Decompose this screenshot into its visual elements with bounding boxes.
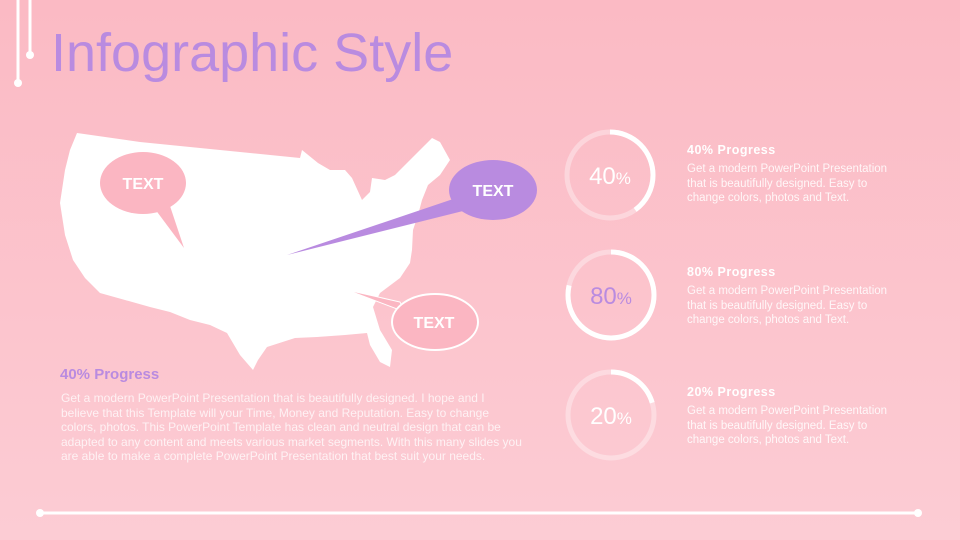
left heading: 40% Progress <box>60 366 159 383</box>
item text 20%: that is beautifully designed. Easy to <box>687 420 867 432</box>
item text 80%: that is beautifully designed. Easy to <box>687 300 867 312</box>
left body text: are able to make a complete PowerPoint Presentation that best suit your needs. <box>61 449 485 463</box>
item text 20%: Get a modern PowerPoint Presentation <box>687 405 887 417</box>
ring 40% <box>567 132 653 218</box>
item text 80%: change colors, photos and Text. <box>687 314 849 326</box>
ring 20%: 20% <box>590 403 632 430</box>
ring 80% <box>568 252 654 338</box>
left body text: adapted to any content and meets various market segments. With this many slides you <box>61 434 522 448</box>
ring 80%: 80% <box>590 283 632 310</box>
item text 40%: change colors, photos and Text. <box>687 192 849 204</box>
callout: purple bubble <box>287 160 537 255</box>
callout: left bubble <box>100 152 186 248</box>
map with callouts <box>60 133 537 370</box>
item text 20% <box>687 385 887 446</box>
callout: purple bubble: TEXT <box>473 183 514 200</box>
left body text <box>61 391 522 463</box>
item text 80%: 80% Progress <box>687 265 776 279</box>
item text 80%: Get a modern PowerPoint Presentation <box>687 285 887 297</box>
item text 40%: 40% Progress <box>687 143 776 157</box>
ring 20% <box>568 372 654 458</box>
item text 40%: that is beautifully designed. Easy to <box>687 178 867 190</box>
left body text: colors, photos. This PowerPoint Template has clean and neutral design that can be <box>61 420 501 434</box>
item text 40% <box>687 143 887 204</box>
item text 20%: 20% Progress <box>687 385 776 399</box>
title: Infographic Style <box>51 23 453 83</box>
callout: lower bubble <box>347 290 478 350</box>
ring 40%: 40% <box>589 163 631 190</box>
item text 20%: change colors, photos and Text. <box>687 434 849 446</box>
left body text: Get a modern PowerPoint Presentation that is beautifully designed. I hope and I <box>61 391 485 405</box>
item text 80% <box>687 265 887 326</box>
callout: left bubble: TEXT <box>123 176 164 193</box>
item text 40%: Get a modern PowerPoint Presentation <box>687 163 887 175</box>
left body text: believe that this Template will your Time, Money and Reputation. Easy to change <box>61 406 489 420</box>
map: USA silhouette <box>60 133 450 370</box>
callout: lower bubble: TEXT <box>414 315 455 332</box>
